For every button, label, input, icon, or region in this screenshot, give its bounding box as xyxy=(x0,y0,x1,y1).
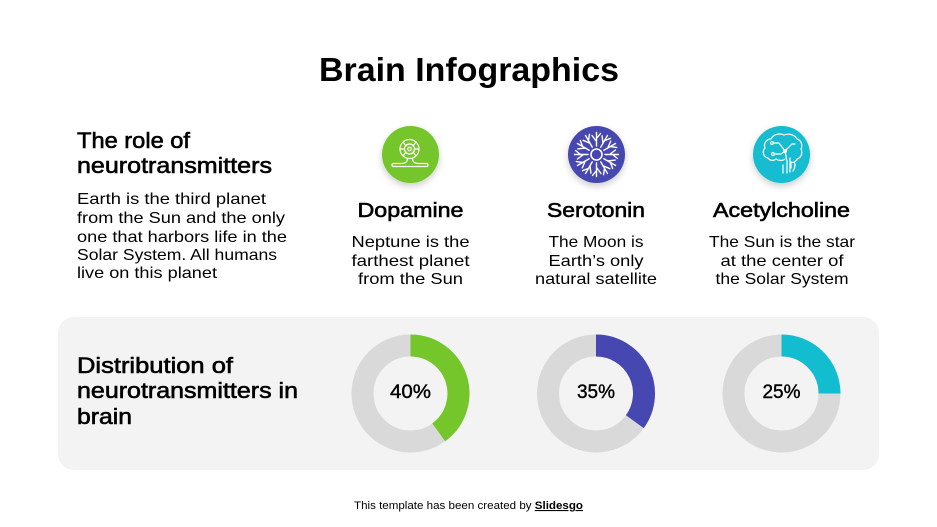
icon: serotonin neuron xyxy=(568,126,625,183)
icon: dopamine neuron xyxy=(382,126,439,183)
column: serotonin xyxy=(535,199,657,288)
column: dopamine: from the Sun xyxy=(358,271,463,288)
donut chart: 40% xyxy=(362,346,458,442)
text block: intro description: from the Sun and the only xyxy=(77,210,285,227)
column: serotonin: Earth’s only xyxy=(548,253,644,270)
text block: intro description xyxy=(77,191,287,282)
column: acetylcholine: the Solar System xyxy=(716,271,848,288)
column: dopamine: Neptune is the xyxy=(352,234,470,251)
text block: intro description: Earth is the third planet xyxy=(77,191,267,208)
column: dopamine: farthest planet xyxy=(352,253,470,270)
column: acetylcholine: at the center of xyxy=(720,253,844,270)
heading: distribution of neurotransmitters in brain xyxy=(77,353,298,429)
column: acetylcholine: The Sun is the star xyxy=(709,234,856,251)
column: serotonin: natural satellite xyxy=(535,271,657,288)
text block: intro description: live on this planet xyxy=(77,265,218,282)
column: acetylcholine xyxy=(709,199,856,288)
column: serotonin: Serotonin xyxy=(547,199,645,222)
heading: distribution of neurotransmitters in brain: brain xyxy=(77,404,132,429)
heading: distribution of neurotransmitters in brain: neurotransmitters in xyxy=(77,378,298,403)
text block: intro description: one that harbors life in the xyxy=(77,229,287,246)
column: acetylcholine: Acetylcholine xyxy=(713,199,850,222)
heading: the role of neurotransmitters: neurotransmitters xyxy=(77,153,272,178)
column: serotonin: The Moon is xyxy=(548,234,644,251)
heading: the role of neurotransmitters xyxy=(77,128,272,178)
panel: distribution xyxy=(58,317,879,470)
donut chart: 35% xyxy=(548,346,644,442)
icon: acetylcholine brain xyxy=(753,126,810,183)
title: Brain Infographics xyxy=(319,51,619,88)
donut chart: 25% xyxy=(734,346,830,442)
heading: distribution of neurotransmitters in brain: Distribution of xyxy=(77,353,234,378)
column: dopamine xyxy=(352,199,470,288)
heading: the role of neurotransmitters: The role of xyxy=(77,128,191,153)
column: dopamine: Dopamine xyxy=(358,199,464,222)
donut chart: 35%: 35% xyxy=(577,381,615,403)
donut chart: 25%: 25% xyxy=(762,381,800,403)
footer credit: This template has been created by Slidesgo xyxy=(354,500,583,512)
donut chart: 40%: 40% xyxy=(390,381,431,403)
text block: intro description: Solar System. All humans xyxy=(77,247,277,264)
